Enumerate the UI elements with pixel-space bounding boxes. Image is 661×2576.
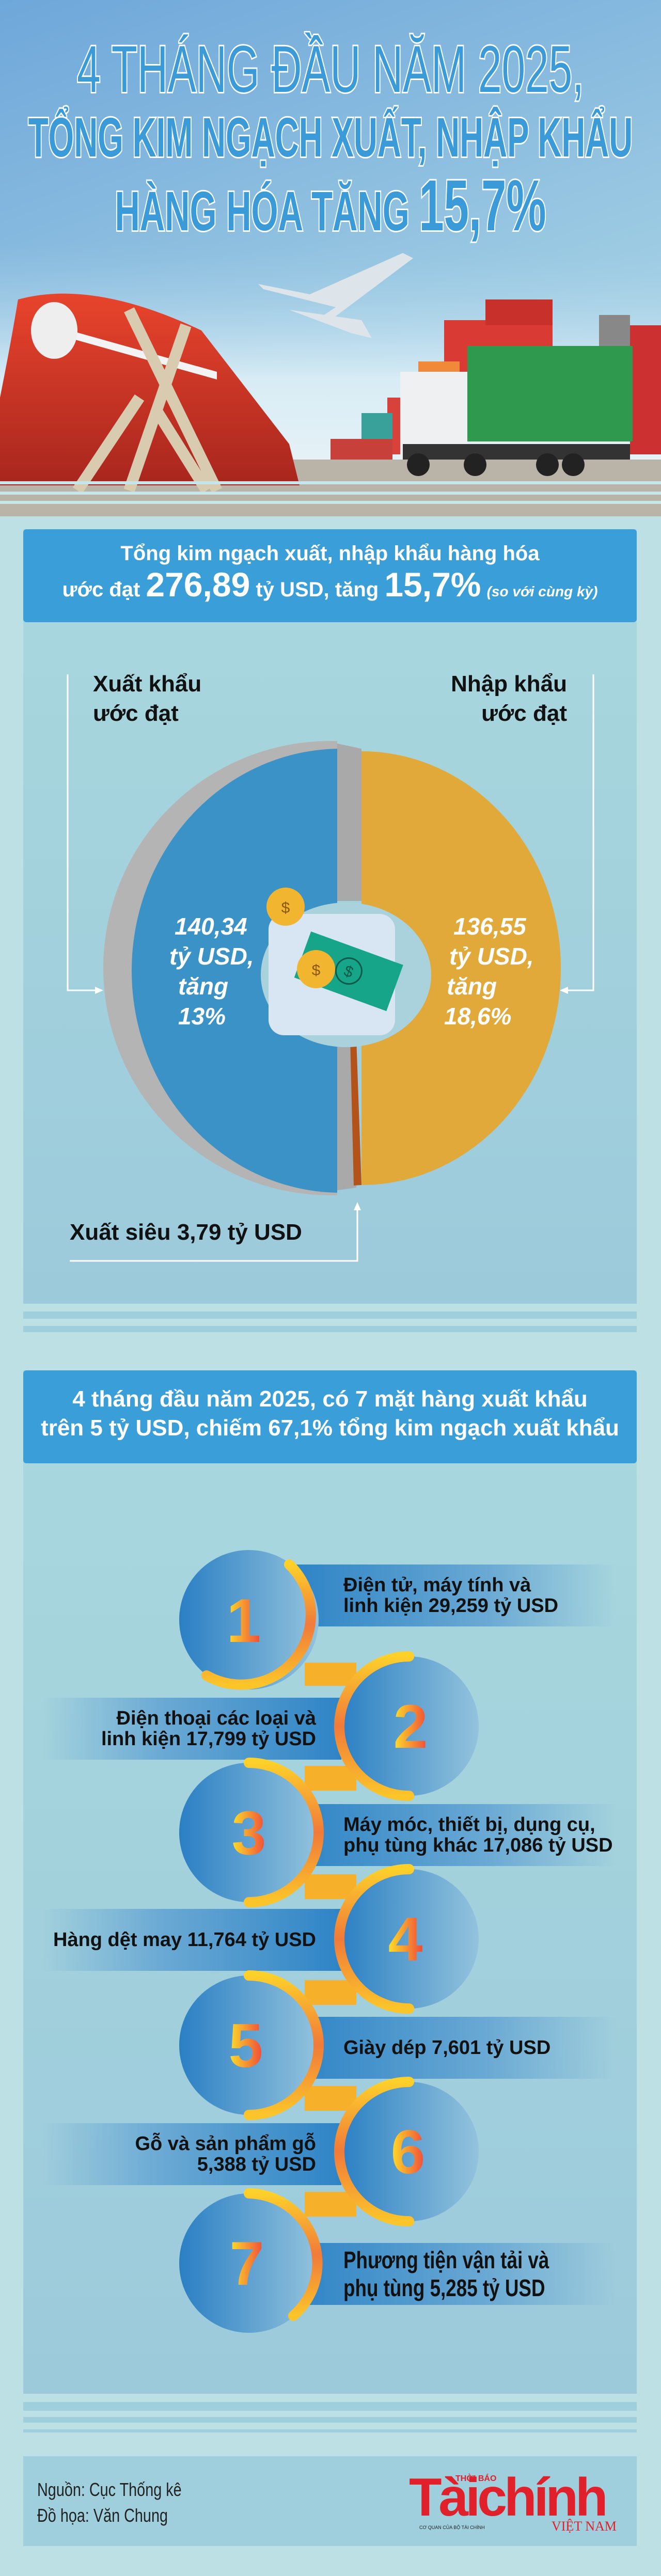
logo: Tài chính: THỜI BÁO (455, 2474, 496, 2483)
bar 2: linh kiện 17,799 tỷ USD (101, 1728, 316, 1750)
header: total value: ước đạt 276,89 tỷ USD, tăng 15,7% (so với cùng kỳ) (62, 565, 597, 604)
logo: Tài chính: CƠ QUAN CỦA BỘ TÀI CHÍNH (419, 2525, 485, 2530)
circle 3 (179, 1763, 319, 1902)
header: 7 goods (23, 1370, 637, 1463)
circle 1: 1 (227, 1586, 261, 1655)
center hole with money icon (261, 888, 431, 1047)
circle 2 (339, 1656, 479, 1796)
title: HÀNG HÓA TĂNG 15,7% (115, 165, 546, 246)
circle 4: 4 (388, 1905, 423, 1974)
label: import: ước đạt (481, 701, 567, 726)
bar 3 (295, 1804, 616, 1866)
logo: Tài chính: VIỆT NAM (552, 2519, 617, 2534)
value: export: tỷ USD, (169, 943, 254, 970)
bar 4 (42, 1909, 341, 1971)
hero background sky (0, 0, 661, 516)
bar 5: Giày dép 7,601 tỷ USD (343, 2037, 550, 2059)
bar 7 (295, 2243, 616, 2305)
trade surplus sliver (350, 1038, 361, 1186)
bar 7: Phương tiện vận tải và (343, 2247, 549, 2273)
logo: Tài chính: Tàichính (409, 2468, 605, 2527)
bar 2 (42, 1698, 341, 1760)
source credits: Nguồn: Cục Thống kê (37, 2479, 182, 2500)
import slice (361, 751, 561, 1185)
value: import: tỷ USD, (449, 943, 534, 970)
circle 6: 6 (391, 2117, 425, 2187)
label: export (93, 671, 201, 726)
center hole with money icon: $ (281, 899, 290, 916)
circle 1 (179, 1550, 319, 1689)
label: import: Nhập khẩu (451, 671, 567, 697)
hero photo: port scene (0, 253, 661, 516)
bar 7: phụ tùng 5,285 tỷ USD (343, 2274, 545, 2301)
header: 7 goods: trên 5 tỷ USD, chiếm 67,1% tổng kim ngạch xuất khẩu (41, 1415, 619, 1441)
label: trade surplus: Xuất siêu 3,79 tỷ USD (70, 1220, 302, 1245)
center hole with money icon: $ (312, 962, 321, 979)
header: 7 goods: 4 tháng đầu năm 2025, có 7 mặt hàng xuất khẩu (72, 1386, 588, 1412)
bar 2: Điện thoại các loại và (117, 1708, 316, 1729)
title (28, 31, 633, 246)
title: 4 THÁNG ĐẦU NĂM 2025, (77, 33, 584, 106)
circle 3: 3 (232, 1798, 266, 1868)
bar 1 (295, 1564, 616, 1626)
label: export: Xuất khẩu (93, 671, 201, 697)
bar 1: linh kiện 29,259 tỷ USD (343, 1595, 558, 1617)
circle 2: 2 (394, 1692, 428, 1761)
value: import: tăng (447, 973, 497, 1000)
center hole with money icon: $ (341, 962, 356, 981)
circle 5: 5 (229, 2011, 263, 2080)
panel: import/export totals (23, 529, 637, 1304)
value: export: 13% (178, 1003, 226, 1030)
source credits: Đồ họa: Văn Chung (37, 2505, 168, 2526)
label: export: ước đạt (93, 701, 179, 726)
footer panel (23, 2456, 637, 2546)
export slice (132, 749, 337, 1193)
value: import: 136,55 (453, 913, 527, 940)
bar 5 (295, 2017, 616, 2079)
value: export: 140,34 (175, 913, 247, 940)
chart: donut export vs import (67, 674, 594, 1262)
bar 6: 5,388 tỷ USD (197, 2154, 316, 2175)
chain of numbered circles (179, 1550, 479, 2333)
panel: top 7 export goods (23, 1370, 637, 2394)
value: export: tăng (178, 973, 228, 1000)
circle 4 (339, 1869, 479, 2009)
label: import (451, 671, 567, 726)
circle 7 (179, 2193, 319, 2333)
title: TỔNG KIM NGẠCH XUẤT, NHẬP KHẨU (28, 106, 633, 168)
header: total value: Tổng kim ngạch xuất, nhập khẩu hàng hóa (120, 542, 540, 565)
circle 7: 7 (230, 2229, 264, 2298)
gray shell (103, 741, 337, 1195)
bar 4: Hàng dệt may 11,764 tỷ USD (53, 1929, 316, 1951)
circle 6 (339, 2082, 479, 2221)
source credits (37, 2479, 182, 2526)
bar 1: Điện tử, máy tính và (343, 1574, 531, 1596)
bars with labels (53, 1564, 613, 2305)
circle 5 (179, 1976, 319, 2115)
bar 3: phụ tùng khác 17,086 tỷ USD (343, 1835, 613, 1856)
bar 6: Gỗ và sản phẩm gỗ (135, 2133, 316, 2155)
value: import: 18,6% (444, 1003, 511, 1030)
header: total value (23, 529, 637, 622)
bar 6 (42, 2123, 341, 2185)
bar 3: Máy móc, thiết bị, dụng cụ, (343, 1814, 595, 1836)
